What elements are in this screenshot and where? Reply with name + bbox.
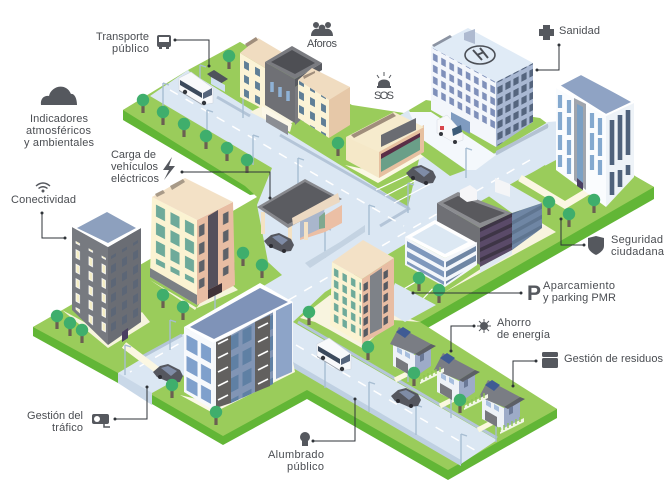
label: alumbrado: Alumbrado [268, 449, 324, 461]
icon: shield [588, 236, 604, 255]
vehicle: car south road [391, 388, 421, 408]
label: alumbrado: público [287, 461, 324, 473]
icon: people counting [311, 22, 333, 36]
building: north group [240, 37, 350, 138]
label: aparcamiento [543, 280, 616, 304]
icon: parking: P [527, 282, 541, 305]
label: carga: Carga de [111, 149, 156, 161]
building: tall grey tower [72, 208, 141, 345]
trees [51, 50, 600, 425]
label: transporte público [96, 31, 149, 55]
label: seguridad: ciudadana [611, 246, 665, 258]
road dashes [130, 90, 530, 452]
label: ahorro [497, 317, 551, 341]
label: aparcamiento: Aparcamiento [543, 280, 615, 292]
vehicle: ambulance [437, 115, 463, 144]
connector lines [40, 38, 586, 442]
icon: siren [377, 72, 391, 88]
label: tráfico: Gestión del [27, 410, 83, 422]
road side: south edge [293, 362, 461, 466]
parking bays [376, 175, 436, 305]
icon: lightning [163, 157, 175, 180]
vehicle: bus south [317, 338, 351, 371]
icon: light bulb [300, 432, 310, 446]
houses with solar panels [390, 327, 525, 434]
vehicle: car on west road [153, 364, 183, 384]
label: sanidad: Sanidad [559, 25, 600, 37]
label: indicadores: atmosféricos [26, 125, 92, 137]
building: low office complex [405, 178, 542, 287]
building: mid tan apartments [330, 240, 394, 344]
label: tráfico [27, 410, 83, 434]
icon: bus [157, 35, 171, 49]
road network [118, 70, 575, 466]
label: indicadores [24, 113, 94, 149]
label: residuos: Gestión de residuos [564, 353, 664, 365]
icon: cloud [41, 87, 77, 105]
icon: wifi [36, 183, 50, 192]
icon: plus [539, 25, 554, 40]
label: ahorro: de energía [497, 329, 551, 341]
helipad [465, 46, 495, 64]
platform top [33, 42, 654, 470]
label: carga [111, 149, 160, 185]
label: SOS: SOS [374, 90, 394, 102]
label: indicadores: Indicadores [30, 113, 88, 125]
label: aforos: Aforos [307, 38, 338, 50]
building: SOS store [346, 112, 424, 178]
label: indicadores: y ambientales [24, 137, 94, 149]
plot pads [62, 95, 600, 430]
bus shelter [207, 70, 228, 92]
label: seguridad [611, 234, 665, 258]
label: seguridad: Seguridad [611, 234, 663, 246]
vehicle: car near SOS [406, 165, 436, 185]
icon: waste bin [542, 352, 558, 368]
label: conectividad: Conectividad [11, 194, 76, 206]
lamp posts [125, 65, 502, 464]
label: tráfico: tráfico [52, 422, 83, 434]
label: transporte público: Transporte [96, 31, 149, 43]
icon: traffic camera [92, 414, 110, 427]
building: beige apartments [150, 178, 235, 305]
building: hospital [431, 28, 548, 155]
label: alumbrado [268, 449, 324, 473]
building: right tower [556, 74, 634, 207]
sidewalk strips [140, 97, 548, 438]
icon: energy saving [477, 319, 491, 333]
label: transporte público: público [112, 43, 149, 55]
building: blue block [184, 283, 293, 410]
label: ahorro: Ahorro [497, 317, 531, 329]
label: carga: eléctricos [111, 173, 160, 185]
label: aparcamiento: y parking PMR [543, 292, 616, 304]
vehicle: bus top [179, 72, 213, 105]
road side: west end [118, 373, 152, 405]
label: carga: vehículos [111, 161, 158, 173]
building: gas charging station [257, 179, 365, 268]
